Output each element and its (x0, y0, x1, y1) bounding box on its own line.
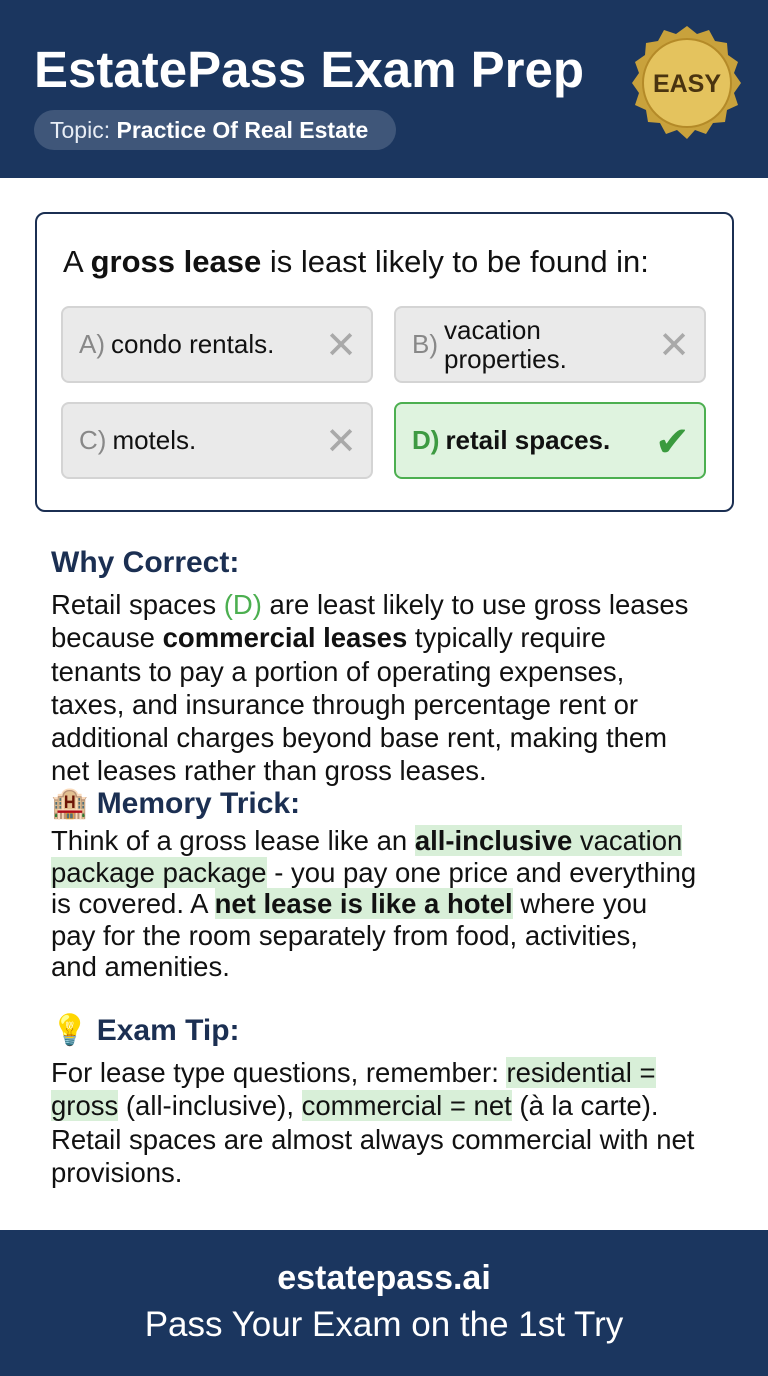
text: exam tip: gross (all-inclusive), commercial = net (à la carte). (51, 1090, 658, 1121)
option C: C) (79, 425, 106, 455)
option D correct: ✔ (655, 418, 690, 465)
text: exam tip (51, 1057, 694, 1188)
option B: properties. (444, 344, 567, 374)
text: why correct: taxes, and insurance through percentage rent or (51, 689, 638, 720)
option B: vacation (444, 314, 541, 344)
option A (61, 306, 373, 383)
text: exam tip: For lease type questions, remember: residential = (51, 1057, 656, 1088)
text: why correct: because commercial leases typically require (51, 622, 606, 653)
option A: ✕ (325, 325, 357, 367)
text: exam tip: provisions. (51, 1157, 182, 1188)
option A: condo rentals. (111, 329, 274, 359)
badge: easy (632, 26, 741, 139)
option D correct (394, 402, 706, 479)
text: memory trick: pay for the room separately from food, activities, (51, 920, 638, 951)
option B: ✕ (658, 325, 690, 367)
text: why correct (51, 589, 688, 786)
footer tagline: Pass Your Exam on the 1st Try (145, 1305, 623, 1344)
option A: A) (79, 329, 105, 359)
topic pill (34, 110, 396, 150)
text: memory trick: package package - you pay one price and everything (51, 857, 696, 888)
option B: B) (412, 329, 438, 359)
option B (394, 306, 706, 383)
option C (61, 402, 373, 479)
heading: why correct: Why Correct: (51, 546, 239, 579)
text: why correct: tenants to pay a portion of operating expenses, (51, 656, 624, 687)
question text: A gross lease is least likely to be found in: (63, 244, 649, 279)
text: memory trick: is covered. A net lease is like a hotel where you (51, 888, 647, 919)
topic pill: Topic: Practice Of Real Estate (50, 117, 368, 143)
text: why correct: additional charges beyond base rent, making them (51, 722, 667, 753)
option C: motels. (112, 425, 196, 455)
badge: easy: EASY (653, 70, 721, 98)
text: memory trick: and amenities. (51, 951, 230, 982)
title: EstatePass Exam Prep (34, 41, 584, 98)
heading: exam tip: 💡 Exam Tip: (51, 1014, 240, 1047)
text: exam tip: Retail spaces are almost always commercial with net (51, 1124, 694, 1155)
text: memory trick (51, 825, 696, 982)
option D correct: D) (412, 425, 439, 455)
footer (0, 1230, 768, 1376)
option C: ✕ (325, 421, 357, 463)
footer site: estatepass.ai (277, 1259, 491, 1297)
text: why correct: net leases rather than gross leases. (51, 755, 487, 786)
question panel (35, 212, 734, 512)
text: memory trick: Think of a gross lease like an all-inclusive vacation (51, 825, 682, 856)
heading: memory trick: 🏨 Memory Trick: (51, 787, 300, 820)
header (0, 0, 768, 178)
text: why correct: Retail spaces (D) are least likely to use gross leases (51, 589, 688, 620)
option D correct: retail spaces. (445, 425, 610, 455)
